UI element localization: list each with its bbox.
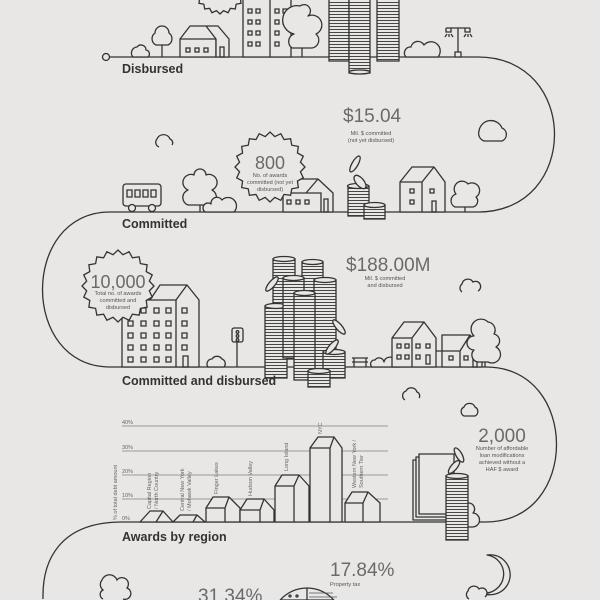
stat: $15.04	[343, 106, 402, 144]
bottom section: pie	[100, 555, 510, 600]
bar chart: awards by region: / Mohawk Valley	[187, 471, 193, 511]
label: Committed and disbursed: Committed and disbursed	[122, 374, 276, 388]
bush	[404, 41, 440, 57]
bar chart: awards by region	[113, 420, 388, 522]
tree	[451, 181, 480, 212]
bars as houses	[140, 511, 173, 522]
coins	[348, 155, 385, 219]
stat: $188.00M: and disbursed	[367, 283, 403, 289]
icon: moon	[482, 555, 510, 595]
cloud big	[479, 121, 506, 141]
stat: $188.00M: Mil. $ committed	[365, 276, 405, 282]
stat: 2,000	[476, 426, 528, 473]
bar chart: awards by region: Long Island	[284, 443, 290, 471]
coin stacks	[264, 256, 347, 387]
house	[180, 26, 229, 57]
bar chart: awards by region: Western New York /	[352, 439, 358, 488]
cloud	[461, 403, 478, 416]
bar chart: awards by region: NYC	[318, 422, 324, 434]
starburst: 10,000: committed and	[100, 298, 136, 304]
stat: $15.04: $15.04	[343, 106, 402, 127]
stat: 2,000: Number of affordable	[476, 446, 528, 452]
stat: $15.04: Mil. $ committed	[351, 131, 391, 137]
cloud small	[156, 135, 173, 147]
tree	[467, 319, 500, 367]
bar chart: awards by region: 10%	[122, 493, 133, 499]
traffic light	[232, 328, 243, 367]
bar chart: awards by region: Finger Lakes	[214, 462, 220, 494]
cloud	[403, 388, 420, 400]
starburst: top (cut off)	[194, 0, 246, 14]
starburst: 10,000	[82, 250, 154, 322]
stat: 2,000: 2,000	[478, 426, 526, 447]
bar chart: awards by region: Southern Tier	[359, 455, 365, 488]
starburst: 800: No. of awards	[253, 173, 287, 179]
cloud	[466, 586, 487, 599]
bar chart: awards by region: 30%	[122, 445, 133, 451]
street lamp	[445, 28, 472, 57]
section: committed and disbursed scene	[82, 250, 500, 400]
starburst: 10,000: disbursed	[106, 305, 130, 311]
bar chart: awards by region: 40%	[122, 420, 133, 426]
tree	[183, 169, 217, 212]
stat: 2,000: loan modifications	[480, 453, 525, 459]
starburst: 800: disbursed)	[257, 187, 283, 193]
stat: 17.84%: 17.84%	[330, 560, 395, 581]
stat: $188.00M: $188.00M	[346, 255, 431, 276]
stat: 17.84%: Property tax	[330, 582, 360, 588]
bar chart: awards by region: Central New York	[180, 468, 186, 511]
label: Disbursed: Disbursed	[122, 62, 183, 76]
starburst: 800: committed (not yet	[247, 180, 293, 186]
stat: 2,000: achieved without a	[479, 460, 526, 466]
bar chart: awards by region: Hudson Valley	[248, 461, 254, 496]
road start marker	[102, 54, 110, 60]
house	[283, 179, 333, 212]
stat: $15.04: (not yet disbursed)	[348, 138, 394, 144]
region labels: Capital Region	[147, 473, 153, 509]
tree	[283, 5, 322, 57]
bushes	[203, 197, 236, 212]
cloud	[460, 279, 481, 292]
stat: $188.00M	[346, 255, 431, 289]
stat: 2,000: HAF $ award	[486, 467, 518, 473]
road: winding path	[42, 57, 556, 599]
bush	[131, 45, 149, 57]
starburst: 10,000: Total no. of awards	[95, 291, 142, 297]
houses	[392, 322, 482, 367]
pie chart	[280, 588, 337, 600]
bench	[352, 358, 368, 367]
section: committed scene	[123, 106, 506, 219]
bar chart: awards by region: 0%	[122, 516, 130, 522]
label: Committed: Committed	[122, 217, 187, 231]
starburst: 10,000: 10,000	[90, 272, 146, 292]
apartment building	[122, 285, 199, 367]
cloud	[100, 575, 131, 599]
bar chart: awards by region: 20%	[122, 469, 133, 475]
tall building	[243, 0, 291, 57]
label: Awards by region: Awards by region	[122, 530, 227, 544]
starburst: 800: 800	[255, 153, 285, 173]
tree	[152, 26, 172, 57]
coin stacks	[329, 0, 399, 74]
bar chart: awards by region: % of total debt amount	[113, 464, 119, 520]
starburst: 800	[235, 132, 305, 202]
bar chart: awards by region: / North Country	[154, 471, 160, 509]
icon: book and coin stack	[413, 447, 480, 540]
bus	[123, 184, 161, 212]
bush	[207, 356, 225, 367]
house	[400, 167, 445, 212]
bushes	[371, 357, 400, 367]
section: disbursed scene	[131, 0, 472, 74]
